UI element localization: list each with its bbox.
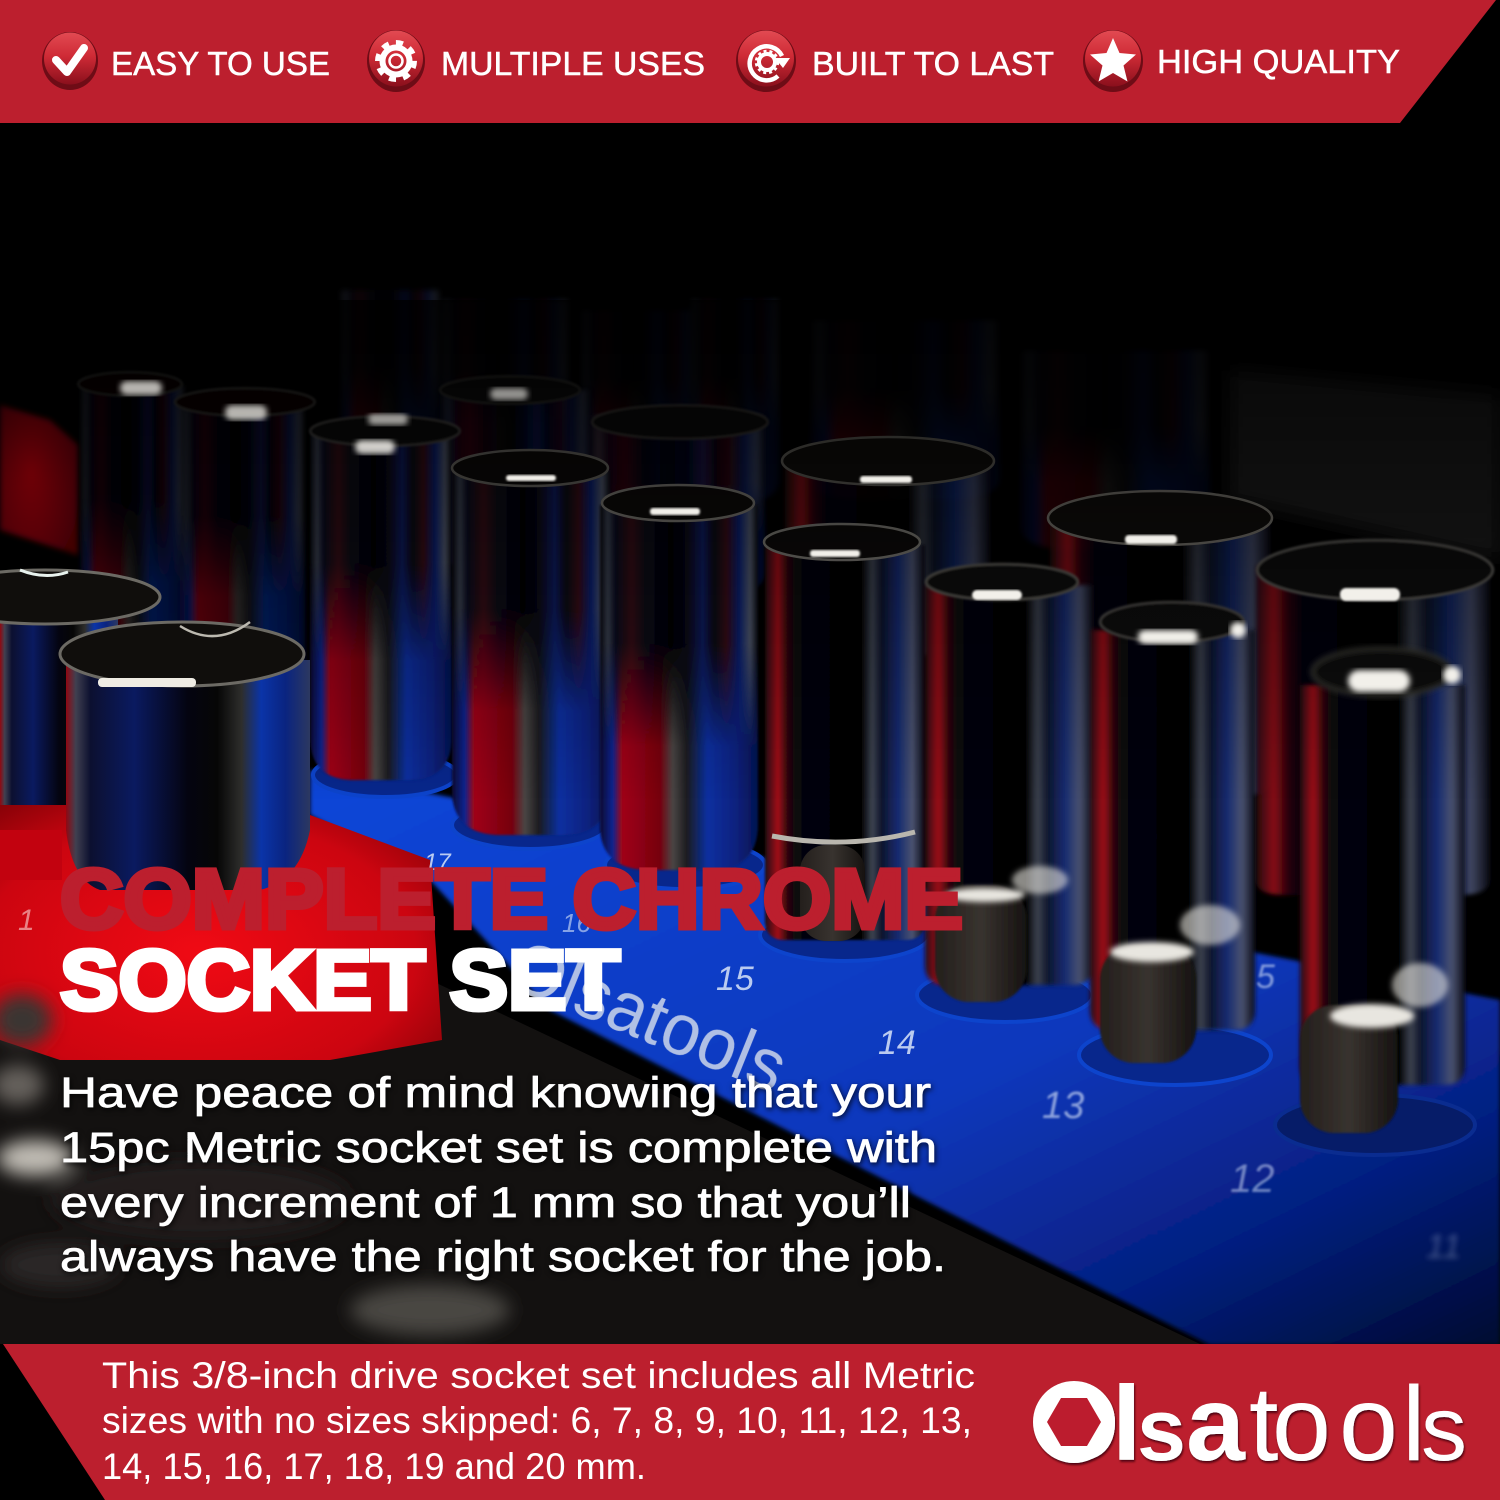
logo: Olsatools: t — [1249, 1365, 1278, 1483]
logo: Olsatools: s — [1137, 1380, 1186, 1479]
red block at far left — [0, 405, 78, 555]
sizes text: 14, 15, 16, 17, 18, 19 and 20 mm. — [102, 1446, 646, 1487]
middle row sockets — [80, 385, 1490, 895]
logo: Olsatools: a — [1186, 1365, 1246, 1483]
headline: COMPLETE CHROME — [60, 852, 963, 946]
feature: multiple uses — [367, 30, 705, 92]
bottom banner — [3, 1344, 1500, 1500]
logo: Olsatools: l — [1402, 1365, 1426, 1483]
blue socket tray — [310, 770, 1500, 1345]
headline — [60, 852, 963, 1027]
body text — [60, 1069, 946, 1281]
tray size numbers: 16 — [562, 908, 591, 938]
logo: Olsatools: s — [1421, 1378, 1467, 1480]
socket necks and domes — [772, 832, 1448, 1133]
feature: built to last: BUILT TO LAST — [812, 45, 1054, 82]
body text: every increment of 1 mm so that you’ll — [60, 1179, 911, 1227]
tray size numbers: 11 — [1426, 1228, 1461, 1266]
tray size numbers: 1 — [18, 904, 35, 937]
feature: high quality: HIGH QUALITY — [1157, 43, 1400, 80]
sizes text — [102, 1355, 975, 1487]
dark work surface — [0, 980, 1200, 1344]
socket rim highlights — [120, 381, 1461, 692]
grey rail at upper right — [1230, 370, 1500, 560]
tray brand print: Olsatools — [499, 926, 798, 1108]
feature: built to last — [736, 30, 1054, 92]
tray size numbers: 12 — [1230, 1157, 1274, 1201]
tray size numbers: 5 — [1256, 958, 1275, 996]
sizes text: This 3/8-inch drive socket set includes all Metric — [102, 1355, 975, 1396]
back row sockets — [340, 290, 1210, 550]
feature: multiple uses: MULTIPLE USES — [441, 45, 705, 82]
headline: SOCKET SET — [60, 933, 620, 1027]
socket rims front — [452, 450, 1452, 696]
red socket tray — [0, 790, 442, 1060]
icon: gear button — [367, 30, 425, 92]
icon: check button — [42, 32, 98, 90]
logo: Olsatools: O — [1037, 1365, 1119, 1483]
blurred foreground lights lower left — [0, 994, 510, 1335]
tray size numbers: 14 — [878, 1024, 916, 1062]
sizes text: sizes with no sizes skipped: 6, 7, 8, 9, 10, 11, 12, 13, — [102, 1400, 972, 1441]
feature: easy to use: EASY TO USE — [111, 45, 330, 82]
feature: easy to use — [42, 32, 330, 90]
tray recesses — [313, 753, 1475, 1155]
logo: Olsatools: o — [1272, 1365, 1331, 1483]
tray size numbers — [18, 849, 1461, 1266]
body text: always have the right socket for the job. — [60, 1233, 946, 1281]
top banner — [0, 0, 1496, 123]
icon: rotating gear button — [736, 30, 796, 92]
tray size numbers: 17 — [424, 849, 452, 876]
feature: high quality — [1083, 30, 1400, 92]
front left sockets — [0, 570, 310, 890]
body text: Have peace of mind knowing that your — [60, 1069, 931, 1117]
body text: 15pc Metric socket set is complete with — [60, 1124, 937, 1172]
main row sockets — [310, 430, 452, 780]
darkening over far sockets — [0, 300, 1500, 800]
tray size numbers: 13 — [1042, 1085, 1084, 1127]
icon: star button — [1083, 30, 1143, 92]
logo: Olsatools: o — [1339, 1365, 1398, 1483]
logo: Olsatools: l — [1112, 1365, 1141, 1483]
socket rims back — [78, 372, 1493, 600]
tray size numbers: 15 — [716, 960, 754, 998]
logo: Olsatools — [1033, 1365, 1467, 1483]
